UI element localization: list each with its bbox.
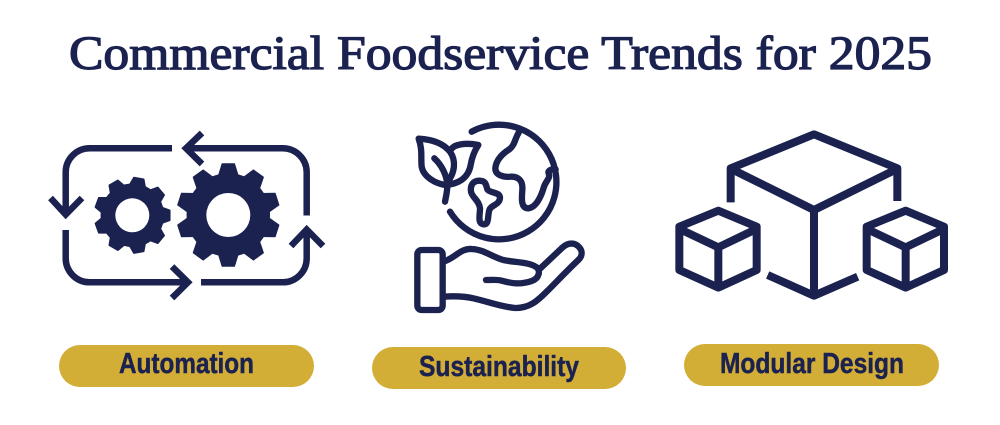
hand palm and fingers (443, 249, 539, 283)
small continent (471, 181, 500, 224)
label: Automation (59, 345, 314, 387)
icon: automation cycle with gears (50, 133, 323, 298)
large cube (731, 134, 897, 296)
label: Modular Design (684, 344, 939, 386)
label: Modular Design: Modular Design (720, 348, 904, 380)
large gear (177, 164, 280, 266)
leaf stem (434, 158, 447, 202)
icon: globe, leaf and open hand (417, 125, 582, 310)
icon: modular cubes (679, 134, 944, 296)
label: Sustainability (372, 347, 626, 389)
small cube left (679, 211, 757, 288)
leaf (419, 139, 478, 185)
hand cuff (417, 250, 443, 310)
title: Commercial Foodservice Trends for 2025 (69, 27, 932, 80)
cycle arrows (50, 133, 323, 298)
large continent (495, 133, 556, 208)
label: Sustainability: Sustainability (419, 351, 579, 383)
globe outline (450, 125, 556, 239)
small gear (94, 177, 170, 254)
small cube right (867, 211, 944, 288)
label: Automation: Automation (119, 348, 254, 380)
